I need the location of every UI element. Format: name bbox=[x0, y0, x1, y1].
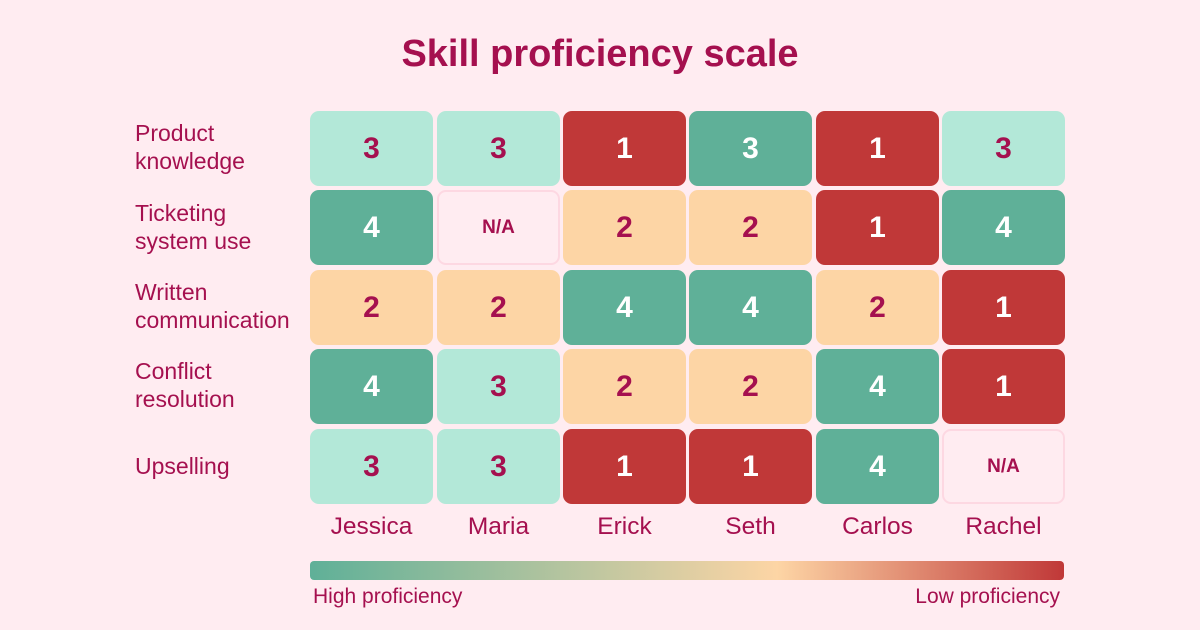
row labels: system use bbox=[135, 228, 251, 254]
heatmap grid: 4 bbox=[742, 290, 759, 324]
heatmap grid: 4 bbox=[363, 370, 380, 402]
heatmap grid: 2 bbox=[869, 290, 886, 324]
heatmap grid: 2 bbox=[490, 290, 507, 324]
heatmap grid: 1 bbox=[869, 132, 886, 164]
heatmap grid: 1 bbox=[869, 210, 886, 244]
heatmap grid: 2 bbox=[742, 370, 759, 402]
row labels: communication bbox=[135, 307, 290, 333]
row labels: Upselling bbox=[135, 453, 230, 479]
heatmap grid: 2 bbox=[616, 210, 633, 244]
row labels: Conflict bbox=[135, 358, 212, 384]
legend labels: High proficiency bbox=[313, 585, 462, 608]
heatmap grid: 2 bbox=[616, 370, 633, 402]
legend labels: Low proficiency bbox=[915, 585, 1060, 608]
heatmap grid: N/A bbox=[987, 456, 1020, 476]
heatmap grid: 3 bbox=[490, 370, 507, 402]
heatmap grid: 4 bbox=[363, 210, 380, 244]
legend labels bbox=[313, 585, 1060, 608]
row labels: Product bbox=[135, 120, 214, 146]
heatmap grid: 4 bbox=[995, 210, 1012, 244]
column names: Carlos bbox=[842, 513, 913, 540]
heatmap grid: 3 bbox=[363, 450, 380, 482]
heatmap grid: 3 bbox=[363, 132, 380, 164]
legend gradient bar bbox=[310, 561, 1064, 580]
title: Skill proficiency scale bbox=[401, 33, 799, 75]
heatmap grid: 4 bbox=[869, 450, 886, 482]
heatmap grid: 2 bbox=[363, 290, 380, 324]
column names: Jessica bbox=[331, 513, 412, 540]
heatmap grid: 1 bbox=[995, 290, 1012, 324]
heatmap grid: 3 bbox=[490, 450, 507, 482]
row labels: Ticketing bbox=[135, 200, 226, 226]
column names: Maria bbox=[468, 513, 529, 540]
column names: Seth bbox=[725, 513, 776, 540]
heatmap grid: 4 bbox=[616, 290, 633, 324]
row labels: Written bbox=[135, 279, 207, 305]
heatmap grid: 1 bbox=[616, 450, 633, 482]
column names: Rachel bbox=[965, 513, 1042, 540]
row labels: knowledge bbox=[135, 148, 245, 174]
row labels bbox=[135, 120, 290, 479]
heatmap grid: 1 bbox=[742, 450, 759, 482]
heatmap grid: 3 bbox=[742, 132, 759, 164]
heatmap grid: 2 bbox=[742, 210, 759, 244]
row labels: resolution bbox=[135, 386, 235, 412]
heatmap grid: 1 bbox=[995, 370, 1012, 402]
heatmap grid: 1 bbox=[616, 132, 633, 164]
heatmap grid: 3 bbox=[995, 132, 1012, 164]
heatmap grid: 3 bbox=[490, 132, 507, 164]
column names bbox=[331, 513, 1042, 540]
column names: Erick bbox=[597, 513, 652, 540]
heatmap grid: 4 bbox=[869, 370, 886, 402]
heatmap grid: N/A bbox=[482, 216, 515, 238]
